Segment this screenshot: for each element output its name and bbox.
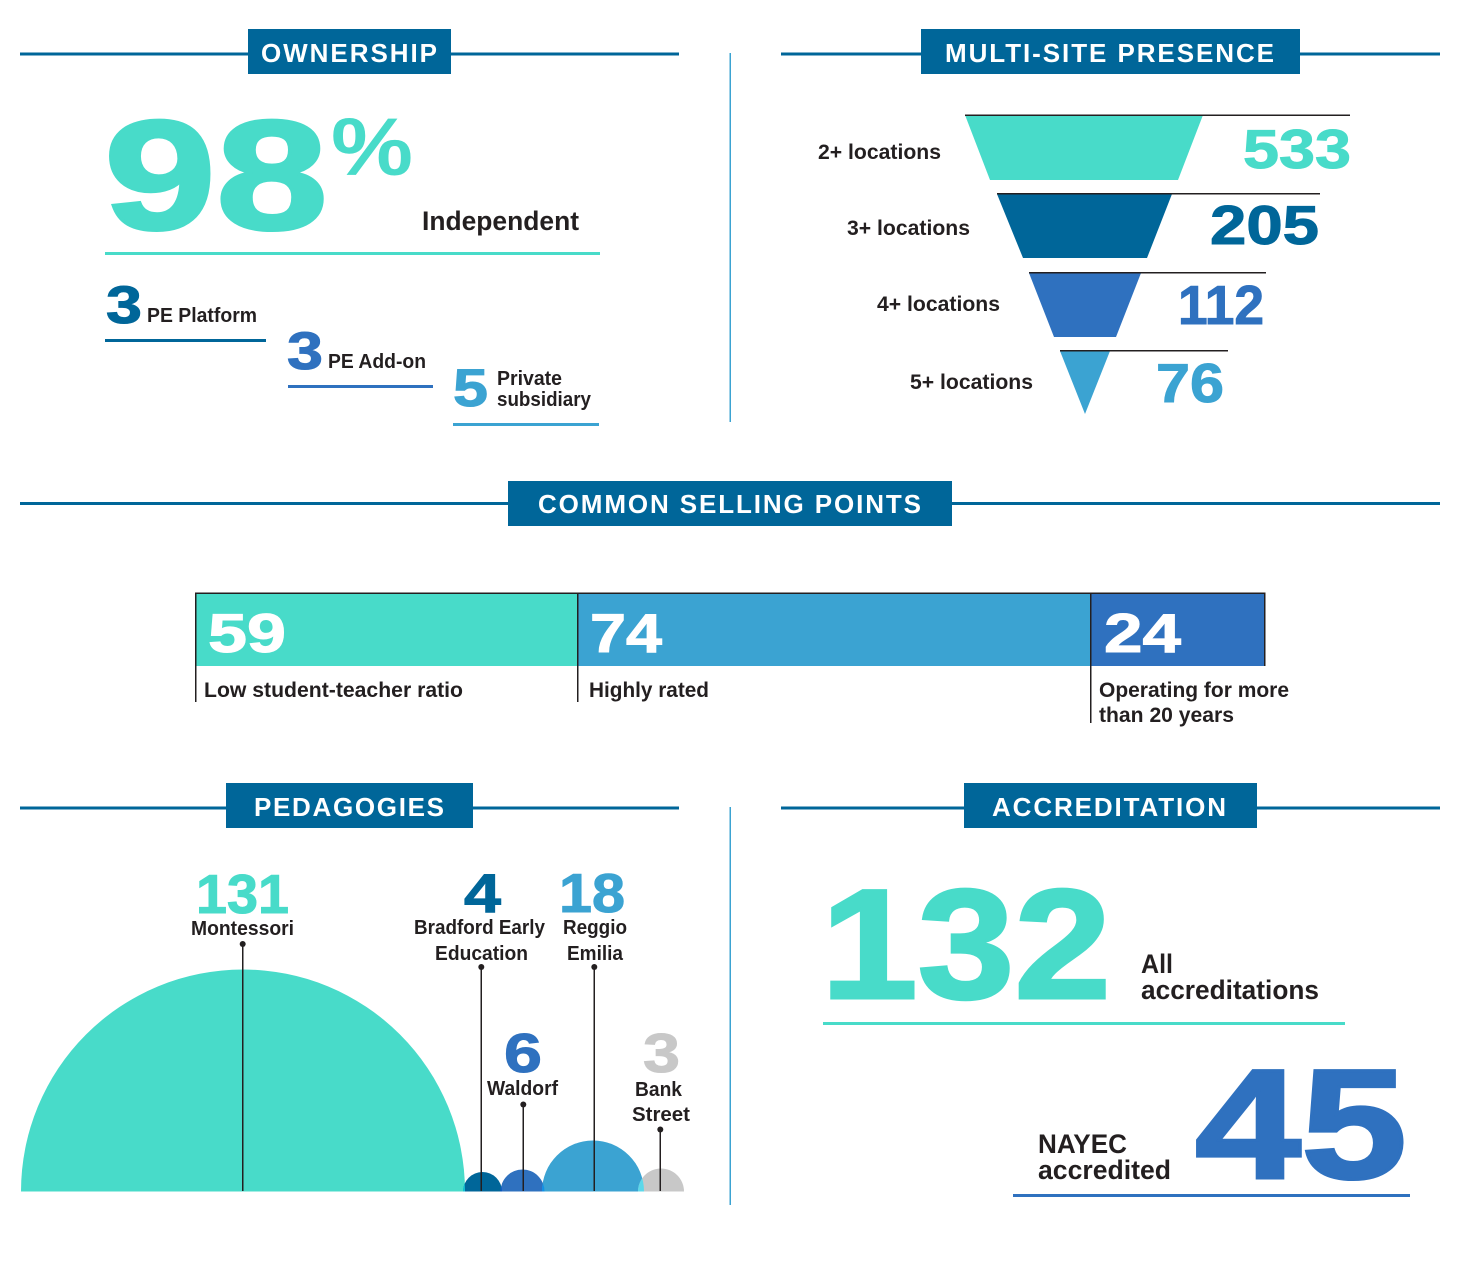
label: 131 Montessori: Montessori bbox=[191, 918, 294, 940]
stat: 45 NAYEC accredited: 45 bbox=[1195, 1038, 1407, 1212]
segment: low student-teacher ratio bbox=[195, 593, 578, 702]
segment: operating for more than 20 years: than 20 years bbox=[1099, 704, 1234, 727]
funnel tier: 3+ locations: 205 bbox=[1210, 194, 1319, 256]
divider: bottom bbox=[730, 807, 731, 1205]
heading: common selling points bbox=[20, 481, 1440, 526]
stat: 3 PE platform: PE Platform bbox=[147, 305, 257, 327]
label: 4 Bradford Early Education: Bradford Early bbox=[414, 917, 546, 939]
label: 131 Montessori: 131 bbox=[196, 863, 289, 925]
stat: 5 private subsidiary: subsidiary bbox=[497, 389, 592, 411]
segment: low student-teacher ratio: Low student-teacher ratio bbox=[204, 679, 463, 702]
stat: 5 private subsidiary: 5 bbox=[453, 359, 488, 418]
stat: 3 PE add-on: 3 bbox=[287, 322, 323, 381]
funnel tier: 2+ locations: 2+ locations bbox=[818, 141, 941, 164]
label: 4 Bradford Early Education: Education bbox=[435, 943, 528, 965]
label: 18 Reggio Emilia: Reggio bbox=[563, 917, 627, 939]
label: 6 Waldorf: 6 bbox=[504, 1022, 542, 1084]
semicircle chart bbox=[21, 970, 684, 1192]
label: 18 Reggio Emilia: Emilia bbox=[567, 943, 624, 965]
heading: multi-site presence: MULTI-SITE PRESENCE bbox=[945, 38, 1274, 68]
stat: 98% independent: Independent bbox=[422, 206, 579, 236]
label: 4 Bradford Early Education: 4 bbox=[464, 862, 501, 924]
stat: 132 all accreditations: 132 bbox=[821, 858, 1111, 1032]
stat: 45 NAYEC accredited: accredited bbox=[1038, 1155, 1171, 1185]
stat: 98% independent bbox=[104, 89, 600, 263]
segment: low student-teacher ratio: 59 bbox=[208, 602, 286, 664]
heading: common selling points: COMMON SELLING POINTS bbox=[538, 489, 921, 519]
heading: pedagogies bbox=[20, 783, 679, 828]
label: 3 Bank Street: Bank bbox=[635, 1079, 683, 1101]
stat: 3 PE add-on bbox=[287, 322, 433, 388]
segment: operating for more than 20 years: Operating for more bbox=[1099, 679, 1289, 702]
funnel tier: 5+ locations: 76 bbox=[1156, 352, 1224, 414]
stat: 98% independent: % bbox=[331, 102, 413, 193]
label: 18 Reggio Emilia: 18 bbox=[559, 862, 625, 924]
segment: operating for more than 20 years: 24 bbox=[1104, 602, 1182, 664]
funnel tier: 2+ locations: 533 bbox=[1243, 118, 1351, 180]
label: 3 Bank Street: Street bbox=[632, 1104, 690, 1126]
stacked bar bbox=[195, 592, 1289, 727]
heading: multi-site presence bbox=[781, 29, 1440, 74]
label: 18 Reggio Emilia bbox=[559, 862, 627, 1191]
stat: 3 PE add-on: PE Add-on bbox=[328, 351, 426, 373]
stat: 132 all accreditations: accreditations bbox=[1141, 975, 1319, 1005]
stat: 5 private subsidiary bbox=[453, 359, 599, 426]
funnel tier: 4+ locations bbox=[877, 272, 1266, 337]
stat: 45 NAYEC accredited bbox=[1013, 1038, 1410, 1212]
label: 6 Waldorf bbox=[487, 1022, 558, 1191]
heading: pedagogies: PEDAGOGIES bbox=[254, 792, 444, 822]
segment: operating for more than 20 years bbox=[1090, 593, 1289, 727]
heading: ownership bbox=[20, 29, 679, 74]
stat: 132 all accreditations bbox=[821, 858, 1345, 1032]
funnel tier: 3+ locations: 3+ locations bbox=[847, 217, 970, 240]
stat: 45 NAYEC accredited: NAYEC bbox=[1038, 1129, 1127, 1159]
stat: 3 PE platform: 3 bbox=[106, 276, 142, 335]
divider: top bbox=[730, 53, 731, 422]
label: 3 Bank Street bbox=[632, 1022, 690, 1191]
funnel tier: 4+ locations: 4+ locations bbox=[877, 293, 1000, 316]
funnel tier: 3+ locations bbox=[847, 193, 1320, 258]
panel: pedagogies bbox=[20, 783, 690, 1192]
funnel tier: 5+ locations: 5+ locations bbox=[910, 371, 1033, 394]
segment: highly rated bbox=[577, 593, 1091, 702]
heading: accreditation: ACCREDITATION bbox=[992, 792, 1226, 822]
label: 4 Bradford Early Education bbox=[414, 862, 546, 1191]
heading: accreditation bbox=[781, 783, 1440, 828]
segment: highly rated: 74 bbox=[590, 602, 662, 664]
label: 6 Waldorf: Waldorf bbox=[487, 1078, 558, 1100]
stat: 3 PE platform bbox=[105, 276, 266, 342]
segment: highly rated: Highly rated bbox=[589, 679, 709, 702]
panel: ownership bbox=[20, 29, 679, 426]
panel: accreditation bbox=[781, 783, 1440, 1212]
panel: multi-site presence bbox=[781, 29, 1440, 414]
panel: common selling points bbox=[20, 481, 1440, 727]
label: 131 Montessori bbox=[191, 863, 294, 1191]
funnel tier: 2+ locations bbox=[818, 114, 1351, 180]
funnel tier: 5+ locations bbox=[910, 350, 1228, 414]
funnel tier: 4+ locations: 112 bbox=[1178, 274, 1264, 336]
stat: 132 all accreditations: All bbox=[1141, 949, 1173, 979]
label: 3 Bank Street: 3 bbox=[643, 1022, 680, 1084]
stat: 98% independent: 98 bbox=[104, 89, 328, 263]
stat: 5 private subsidiary: Private bbox=[497, 368, 562, 390]
heading: ownership: OWNERSHIP bbox=[261, 38, 437, 68]
